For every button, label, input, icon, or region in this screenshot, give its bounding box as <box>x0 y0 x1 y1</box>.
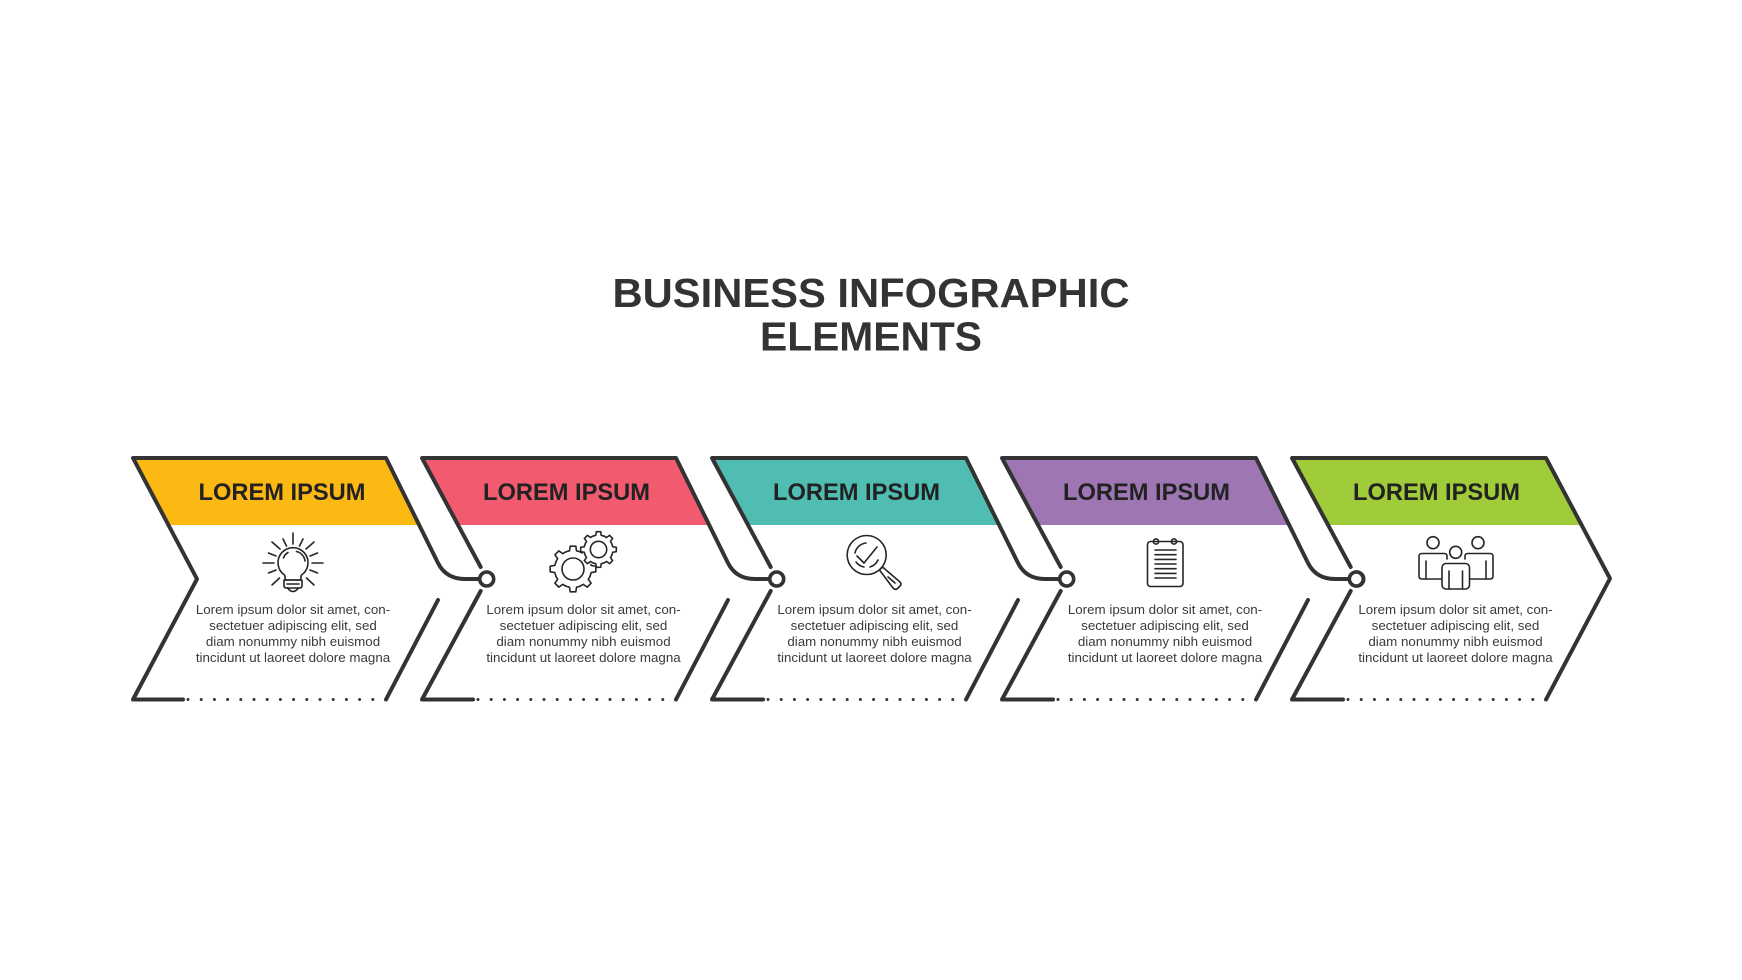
header band: step 2 <box>423 458 712 525</box>
small gear <box>581 532 616 567</box>
connector node: step 2 <box>770 572 784 586</box>
panel: step 5 (green) <box>1292 458 1610 700</box>
heading: step 2: LOREM IPSUM <box>483 479 650 506</box>
description: step 2: sectetuer adipiscing elit, sed <box>500 618 667 633</box>
description: step 3: tincidunt ut laoreet dolore magna <box>777 650 972 665</box>
title: BUSINESS INFOGRAPHIC <box>612 270 1130 316</box>
connector node: step 3 <box>1060 572 1074 586</box>
title: ELEMENTS <box>760 314 982 360</box>
description: step 1: diam nonummy nibh euismod <box>206 634 380 649</box>
header band: step 5 <box>1293 458 1582 525</box>
chevron outline: step 2 <box>422 458 770 700</box>
heading: step 4: LOREM IPSUM <box>1063 479 1230 506</box>
description: step 2 <box>486 602 681 665</box>
connector node: step 1 <box>480 572 494 586</box>
description: step 4: diam nonummy nibh euismod <box>1078 634 1252 649</box>
header band: step 4 <box>1003 458 1292 525</box>
icon: notepad <box>1148 539 1183 586</box>
heading: step 1: LOREM IPSUM <box>198 479 366 506</box>
big gear <box>550 546 596 592</box>
description: step 4 <box>1068 602 1263 665</box>
description: step 1 <box>196 602 391 665</box>
description: step 2: tincidunt ut laoreet dolore magna <box>486 650 681 665</box>
icon: light bulb <box>263 533 323 592</box>
connector node: step 5 <box>1349 572 1363 586</box>
description: step 3 <box>777 602 972 665</box>
header band: step 1 <box>133 458 422 525</box>
panel: step 1 (yellow) <box>133 458 494 700</box>
description: step 5: tincidunt ut laoreet dolore magna <box>1358 650 1553 665</box>
icon: magnifier with check <box>847 536 901 589</box>
description: step 2: Lorem ipsum dolor sit amet, con- <box>486 602 681 617</box>
description: step 4: Lorem ipsum dolor sit amet, con- <box>1068 602 1262 617</box>
panel: step 3 (teal) <box>712 458 1074 700</box>
connector node: step 4 <box>1350 572 1364 586</box>
description: step 3: Lorem ipsum dolor sit amet, con- <box>777 602 972 617</box>
heading: step 5: LOREM IPSUM <box>1353 479 1520 506</box>
description: step 4: sectetuer adipiscing elit, sed <box>1081 618 1249 633</box>
header band: step 3 <box>713 458 1002 525</box>
chevron outline: step 4 <box>1002 458 1350 700</box>
icon: gears <box>550 532 616 592</box>
description: step 4: tincidunt ut laoreet dolore magna <box>1068 650 1263 665</box>
description: step 5: Lorem ipsum dolor sit amet, con- <box>1358 602 1553 617</box>
description: step 1: Lorem ipsum dolor sit amet, con- <box>196 602 390 617</box>
panel: step 2 (pink) <box>422 458 784 700</box>
description: step 1: tincidunt ut laoreet dolore magna <box>196 650 391 665</box>
description: step 3: diam nonummy nibh euismod <box>787 634 962 649</box>
description: step 5: diam nonummy nibh euismod <box>1368 634 1543 649</box>
description: step 1: sectetuer adipiscing elit, sed <box>209 618 377 633</box>
chevron outline: step 1 <box>133 458 480 700</box>
chevron outline: step 3 <box>712 458 1060 700</box>
panel: step 4 (purple) <box>1002 458 1364 700</box>
description: step 3: sectetuer adipiscing elit, sed <box>791 618 958 633</box>
icon: team of people <box>1419 537 1493 589</box>
description: step 5 <box>1358 602 1553 665</box>
description: step 5: sectetuer adipiscing elit, sed <box>1372 618 1539 633</box>
description: step 2: diam nonummy nibh euismod <box>496 634 671 649</box>
heading: step 3: LOREM IPSUM <box>773 479 940 506</box>
chevron outline: step 5 <box>1292 458 1610 700</box>
title <box>612 270 1130 360</box>
